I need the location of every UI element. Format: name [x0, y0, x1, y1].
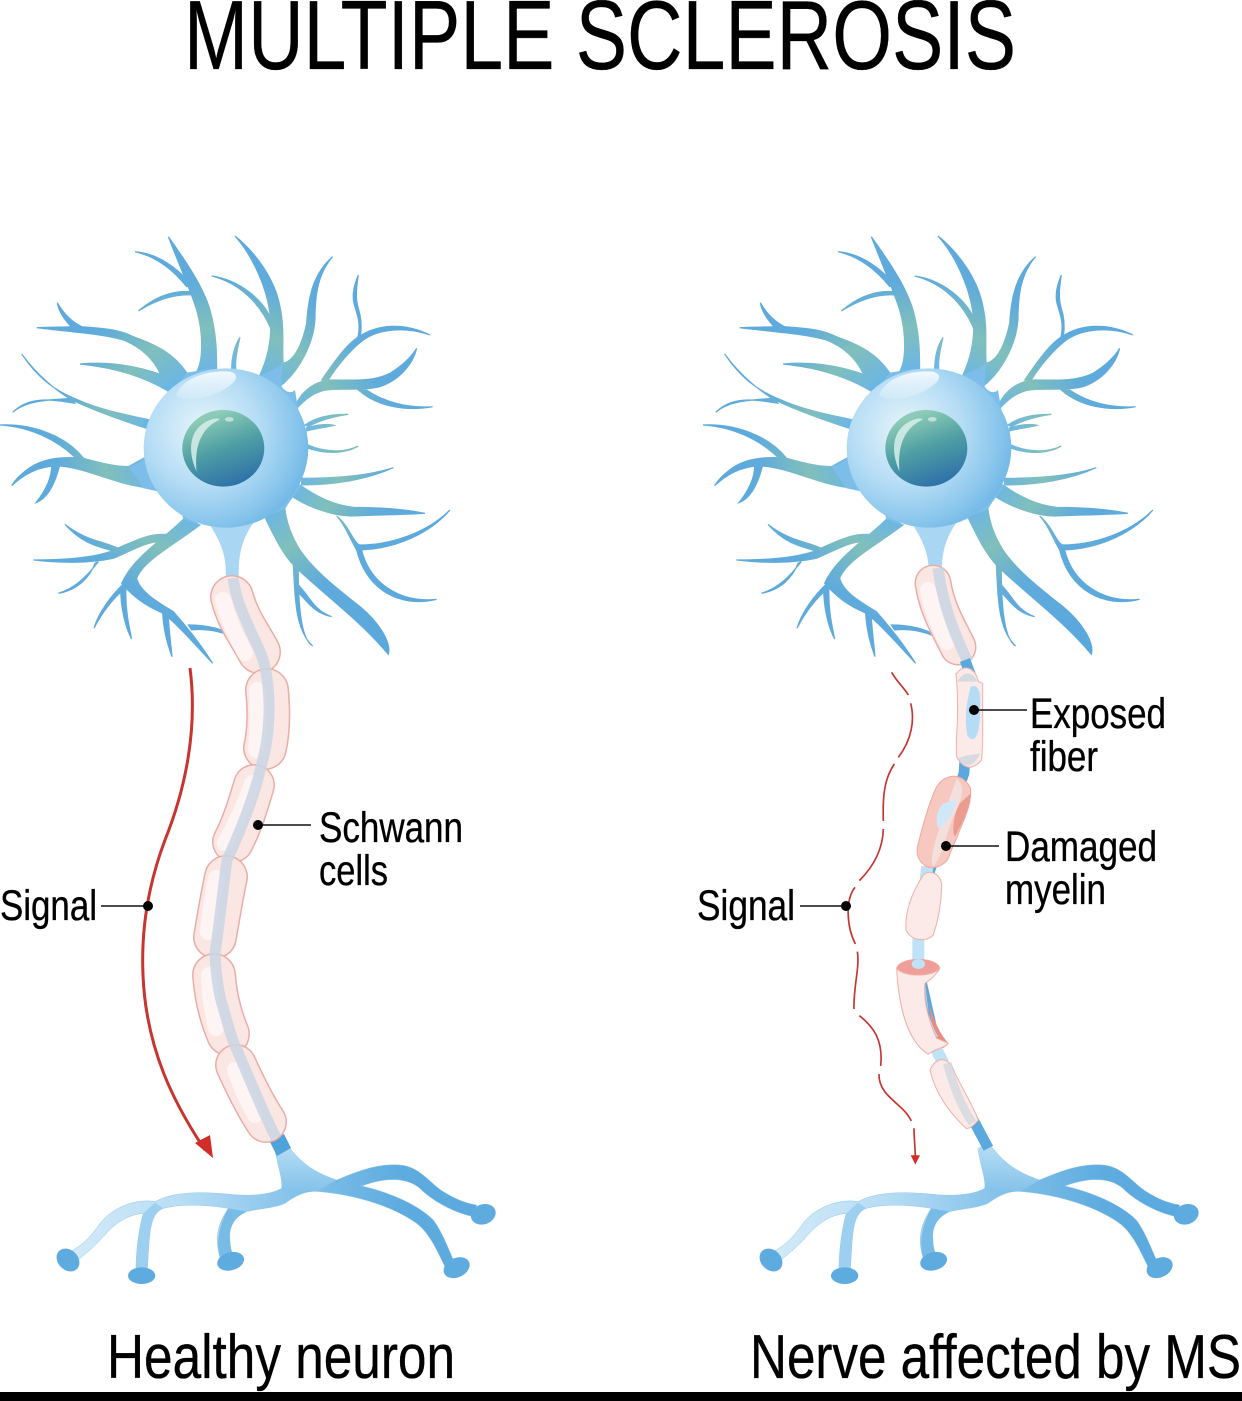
- first sheath segment: [928, 568, 968, 662]
- label: Signal left: Signal: [0, 882, 97, 930]
- exposed fiber segment: [956, 668, 983, 767]
- intact short segment: [906, 872, 942, 940]
- label: Damaged myelin: Damaged: [1005, 823, 1157, 871]
- label: Damaged myelin: myelin: [1005, 866, 1106, 914]
- signal arrow healthy: [143, 668, 213, 1158]
- Schwann cell sheath segments: [208, 578, 276, 1138]
- label: Signal right: Signal: [697, 882, 795, 930]
- label: Schwann cells: [253, 804, 463, 895]
- damaged axon with myelin: [897, 660, 988, 1148]
- axon terminal branches: [755, 1143, 1202, 1284]
- blue axon end: [270, 1134, 291, 1156]
- cell body and dendrites: [703, 236, 1153, 663]
- axon terminal branches: [52, 1143, 499, 1284]
- label: Exposed fiber: Exposed: [1030, 690, 1166, 738]
- label: Schwann cells: Schwann: [319, 804, 463, 852]
- affected neuron illustration: [703, 236, 1202, 1284]
- cell body and dendrites: [0, 236, 450, 663]
- dashed signal path: [848, 672, 920, 1165]
- healthy neuron illustration: [0, 236, 499, 1284]
- damaged myelin segment: [917, 776, 971, 868]
- label: Exposed fiber: [969, 690, 1166, 781]
- torn myelin segment: [897, 959, 948, 1054]
- lower segment: [930, 1060, 978, 1128]
- bottom black bar: [0, 1392, 1242, 1401]
- label: Schwann cells: cells: [319, 847, 388, 895]
- bare axon fibre: [918, 660, 988, 1148]
- caption: Healthy neuron: Healthy neuron: [107, 1323, 455, 1392]
- label: Exposed fiber: fiber: [1030, 733, 1098, 781]
- label: Damaged myelin: [941, 823, 1157, 914]
